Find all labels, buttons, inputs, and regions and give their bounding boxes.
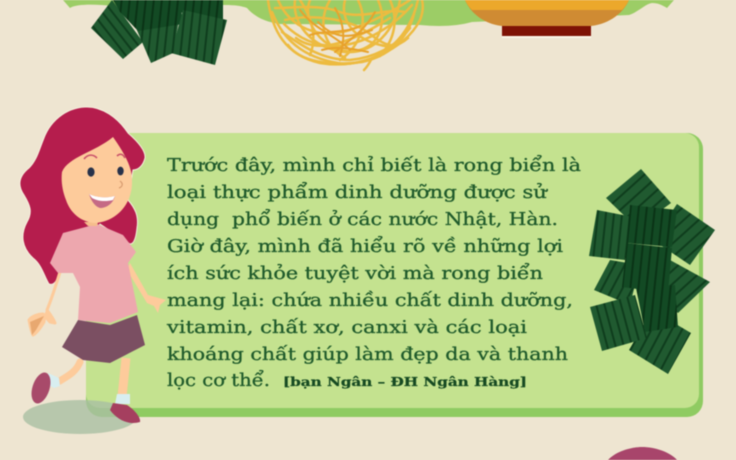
icon: seaweed pile top <box>91 0 227 65</box>
face <box>62 137 132 223</box>
nose <box>119 181 122 188</box>
attribution: [bạn Ngân – ĐH Ngân Hàng] <box>283 375 527 389</box>
icon: seaweed pile right <box>589 169 715 374</box>
character: girl <box>20 107 166 434</box>
quote text: ích sức khỏe tuyệt vời mà rong biển <box>167 262 543 284</box>
hair <box>20 107 145 284</box>
quote text: vitamin, chất xơ, canxi và các loại <box>166 317 527 338</box>
eyebrows <box>84 154 125 159</box>
neck <box>84 222 98 226</box>
icon: noodles <box>268 0 423 70</box>
quote text: khoáng chất giúp làm đẹp da và thanh <box>167 344 568 365</box>
back arm <box>29 272 60 335</box>
panel: quote card <box>86 133 703 417</box>
quote text: Trước đây, mình chỉ biết là rong biển là <box>167 154 581 176</box>
quote text: dụng phổ biến ở các nước Nhật, Hàn. <box>167 208 558 230</box>
mouth <box>89 194 115 208</box>
quote text: lọc cơ thể. <box>167 369 270 391</box>
shirt <box>50 224 138 323</box>
icon: next character hair at bottom edge <box>608 447 677 460</box>
top green scalloped band <box>63 0 674 26</box>
quote text: loại thực phẩm dinh dưỡng được sử <box>167 181 549 203</box>
front leg <box>122 358 126 397</box>
quote text <box>166 154 581 391</box>
front arm <box>127 263 166 313</box>
ground shadow <box>23 400 137 434</box>
quote text: Giờ đây, mình đã hiểu rõ về những lợi <box>167 235 563 257</box>
eyes <box>87 167 95 177</box>
skirt <box>62 315 145 363</box>
back leg <box>58 362 80 382</box>
quote text: mang lại: chứa nhiều chất dinh dưỡng, <box>167 290 573 311</box>
icon: bowl <box>465 0 629 38</box>
